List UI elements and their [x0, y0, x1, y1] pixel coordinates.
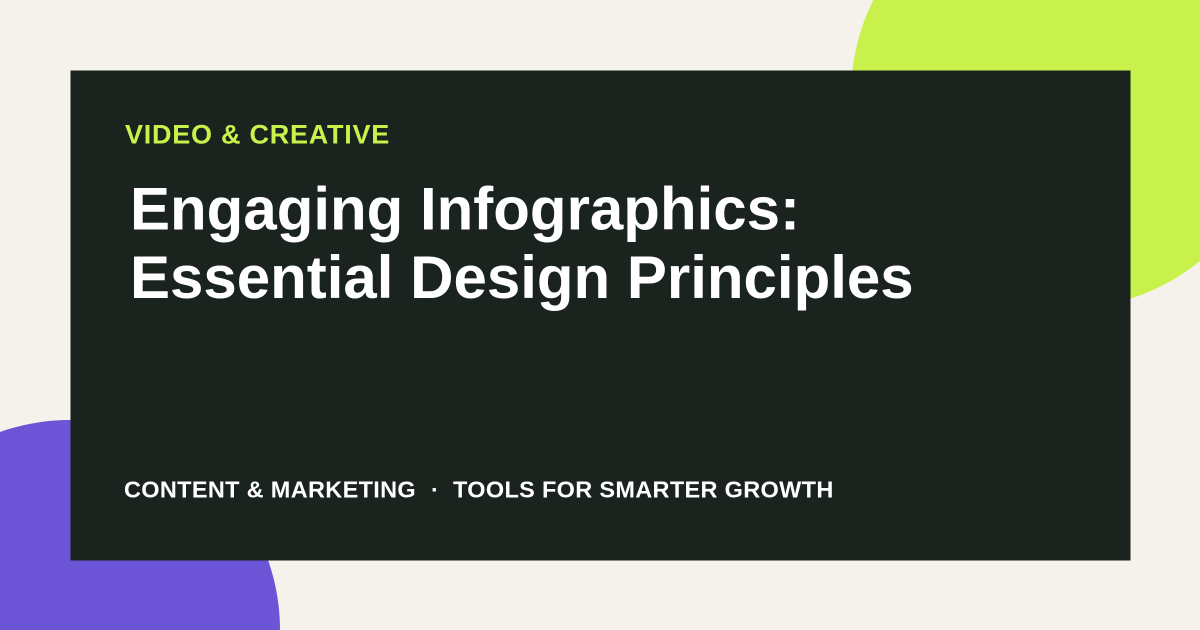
title: Essential Design Principles [130, 244, 914, 311]
title [130, 176, 914, 311]
footer tagline: TOOLS FOR SMARTER GROWTH [453, 477, 834, 503]
decorative circle: purple [0, 420, 280, 630]
eyebrow label: VIDEO & CREATIVE [125, 119, 390, 149]
panel: dark card [70, 70, 1130, 560]
footer tagline: · [431, 477, 439, 503]
footer tagline: CONTENT & MARKETING [124, 477, 416, 503]
title: Engaging Infographics: [130, 176, 800, 242]
decorative circle: lime [851, 0, 1200, 309]
footer tagline [124, 477, 834, 503]
